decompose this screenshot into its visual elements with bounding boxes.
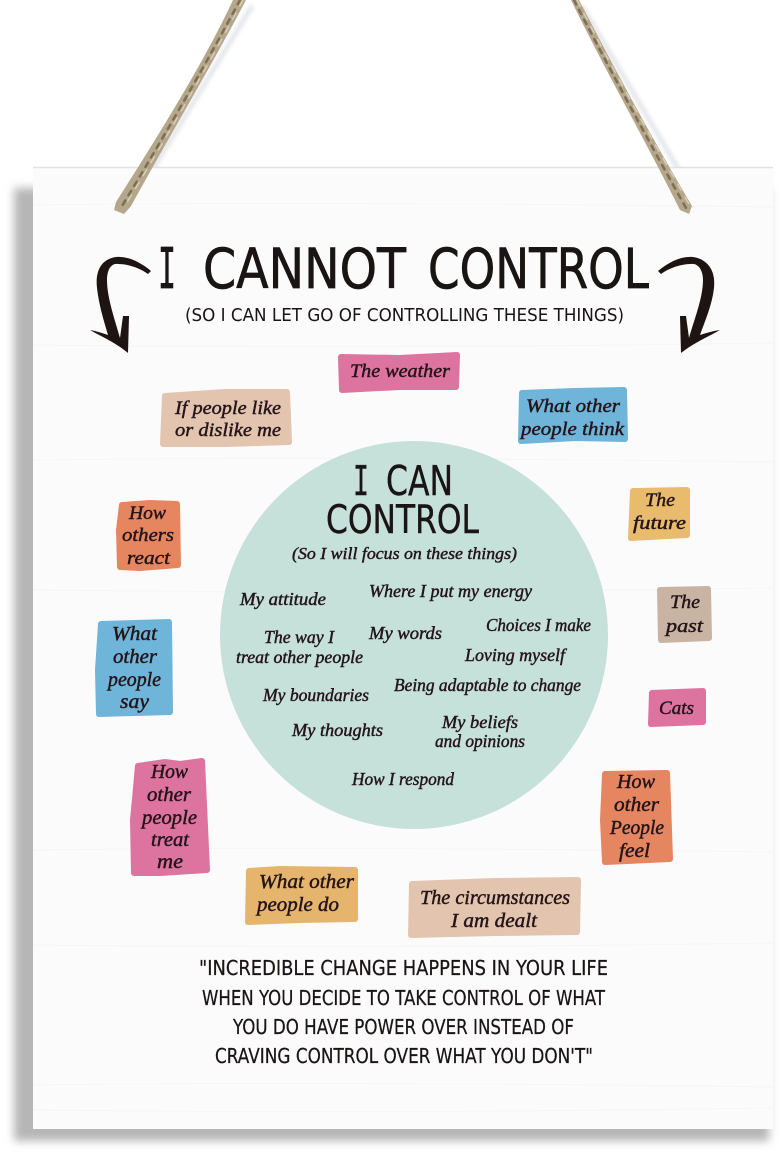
tag: how others react: How [128, 503, 166, 524]
list of things I can control: My boundaries [262, 685, 369, 705]
tag: the future [631, 490, 687, 538]
tag: the circumstances I am dealt: The circumstances [420, 887, 570, 909]
tag: how other people treat me: How [150, 761, 189, 783]
icon: left jute rope [114, 0, 247, 214]
tag: the future: The [645, 490, 675, 511]
tag: the past: The [670, 592, 700, 613]
tag: how other people treat me: treat [151, 829, 189, 851]
quote: CRAVING CONTROL OVER WHAT YOU DON'T" [215, 1044, 593, 1068]
tag: how other people treat me: me [157, 851, 183, 873]
tag: what other people do: What other [259, 872, 354, 893]
list of things I can control: Being adaptable to change [394, 675, 581, 695]
quote: WHEN YOU DECIDE TO TAKE CONTROL OF WHAT [202, 986, 606, 1010]
tag: if people like or dislike me: or dislike me [175, 420, 281, 441]
tag: how other people treat me: other [147, 784, 191, 806]
tag: what other people say: What [112, 623, 157, 645]
tag: what other people say: people [106, 669, 161, 691]
list of things I can control: My beliefs [441, 712, 518, 732]
list of things I can control: My thoughts [291, 720, 383, 740]
tag: what other people do [248, 869, 355, 922]
tag: how others react [119, 503, 178, 569]
title: I cannot control [158, 237, 649, 302]
tag: how other people feel: How [616, 771, 656, 793]
tag: how others react: react [127, 548, 171, 569]
rope shadows [131, 6, 694, 205]
tag: what other people think: people think [519, 419, 625, 440]
list of things I can control: My attitude [239, 589, 326, 609]
list of things I can control: The way I [264, 627, 335, 647]
tag: cats: Cats [659, 698, 694, 719]
tag: how others react: others [122, 525, 174, 546]
tag: cats [651, 691, 703, 724]
tag: what other people think [519, 390, 625, 441]
list of things I can control: My words [368, 623, 442, 643]
tag: the weather: The weather [350, 361, 451, 382]
board shadow [14, 188, 769, 1141]
tag: what other people think: What other [526, 396, 621, 417]
quote: "INCREDIBLE CHANGE HAPPENS IN YOUR LIFE [199, 956, 608, 980]
tag: what other people say: say [120, 691, 149, 713]
title: I cannot control: CANNOT [203, 237, 406, 301]
tag: what other people say [98, 622, 170, 714]
tag: the past: past [664, 616, 704, 637]
list of things I can control: How I respond [351, 769, 454, 789]
tag: how other people feel: People [609, 817, 664, 839]
tag: how other people treat me [133, 761, 207, 873]
list of things I can control: Where I put my energy [369, 581, 532, 601]
tag: how other people treat me: people [140, 807, 197, 829]
tag: what other people say: other [113, 646, 157, 668]
title: I cannot control: CONTROL [428, 237, 649, 301]
subtitle: (SO I CAN LET GO OF CONTROLLING THESE THINGS) [185, 305, 624, 326]
tag: the past [660, 589, 709, 640]
tag: how other people feel [603, 771, 670, 862]
circle subheading: (So I will focus on these things) [292, 544, 517, 563]
circle heading: I [353, 457, 369, 505]
panel: I can control circle [220, 441, 608, 829]
list of things I can control: treat other people [236, 647, 363, 667]
tag: the future: future [633, 513, 686, 534]
arrow: left [90, 257, 151, 353]
tag: the circumstances I am dealt [411, 880, 578, 935]
list of things I can control: Choices I make [486, 615, 591, 635]
tag: the weather [341, 355, 457, 390]
list of things I can control: and opinions [435, 731, 525, 751]
list of things I can control [236, 581, 591, 789]
icon: right jute rope [570, 0, 692, 214]
list of things I can control: Loving myself [464, 645, 567, 665]
quote: YOU DO HAVE POWER OVER INSTEAD OF [232, 1015, 574, 1039]
tag: what other people do: people do [255, 895, 339, 916]
tag: how other people feel: other [614, 794, 659, 816]
tag: the circumstances I am dealt: I am dealt [450, 910, 537, 932]
title: I cannot control: I [158, 237, 176, 302]
tag: how other people feel: feel [619, 840, 650, 862]
circle heading [326, 457, 479, 543]
tag: if people like or dislike me: If people like [174, 398, 281, 419]
panel: wooden board [33, 167, 773, 1129]
circle heading: CAN [386, 457, 453, 505]
circle heading: CONTROL [326, 498, 479, 543]
arrow: right [658, 257, 720, 353]
tag: if people like or dislike me [163, 392, 289, 444]
quote [199, 956, 608, 1068]
